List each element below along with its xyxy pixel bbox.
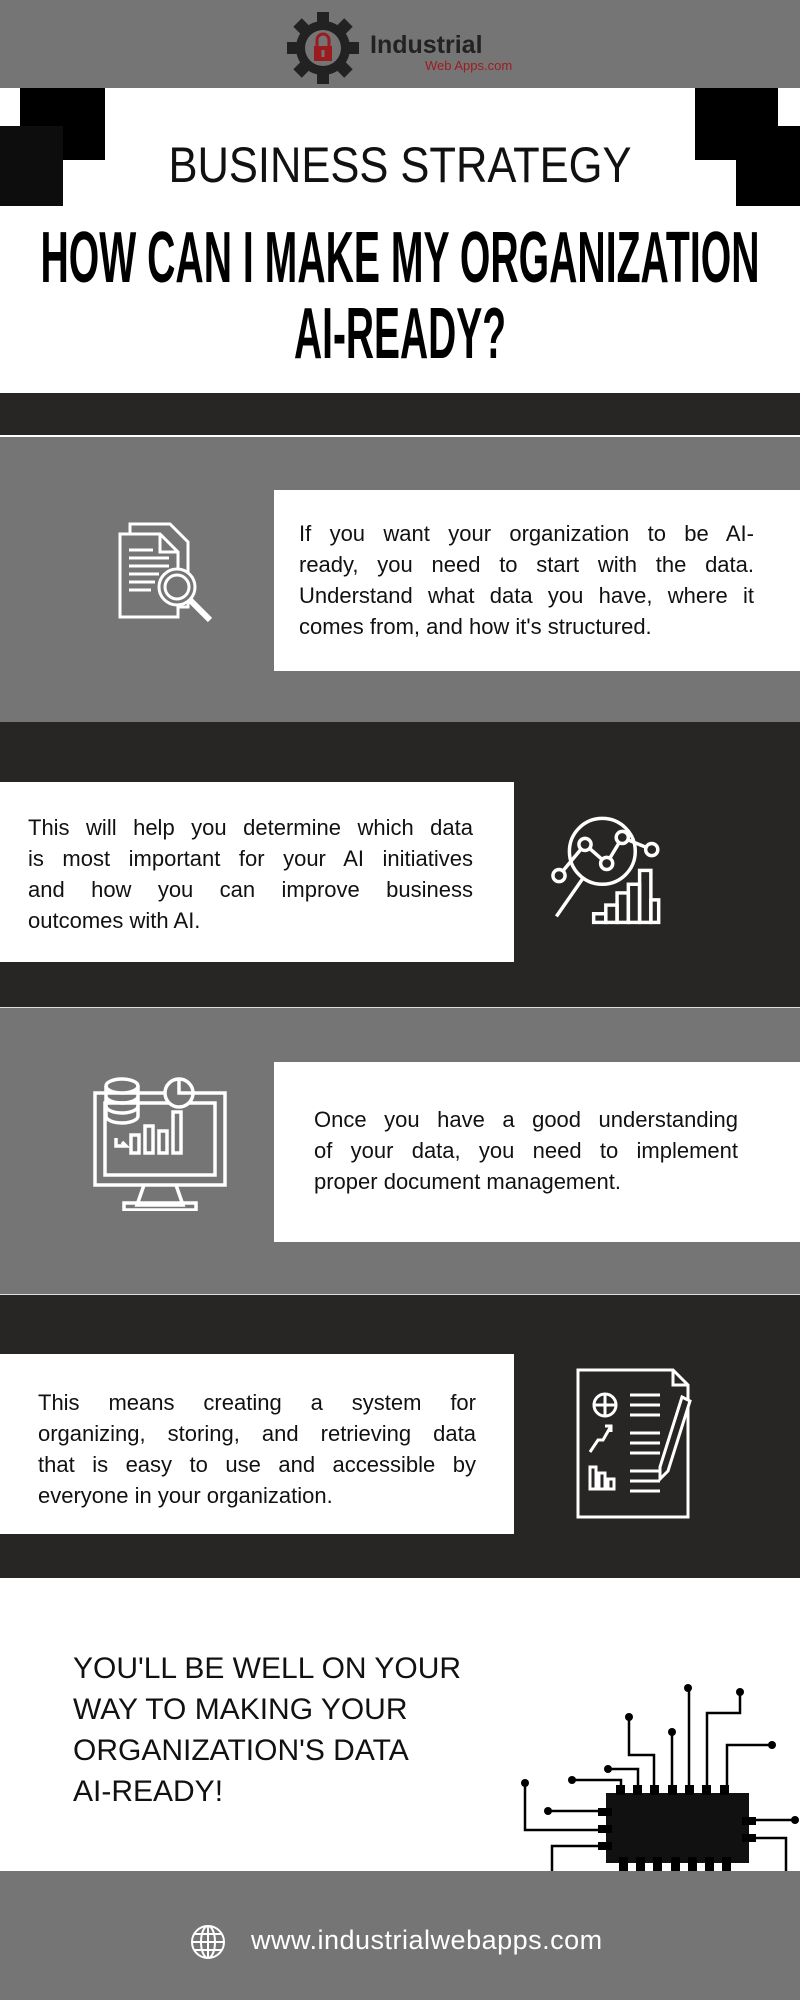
text box 4 (0, 1354, 514, 1534)
section 4 (0, 1295, 800, 1578)
text box 1 (274, 490, 800, 671)
section 3 (0, 1008, 800, 1294)
text box 3 (274, 1062, 800, 1242)
dark band (0, 393, 800, 435)
header bar with logo (0, 0, 800, 88)
text box 1: ready, you need to start with the data. (299, 552, 754, 577)
conclusion text: WAY TO MAKING YOUR (73, 1693, 408, 1726)
icon: circuit chip (521, 1684, 799, 1871)
text box 4: organizing, storing, and retrieving data (38, 1421, 476, 1446)
section 2 (0, 722, 800, 1007)
text box 1: Understand what data you have, where it (299, 583, 754, 608)
conclusion text: ORGANIZATION'S DATA (73, 1734, 409, 1767)
text box 2: is most important for your AI initiatives (28, 846, 473, 871)
text box 3: of your data, you need to implement (314, 1138, 738, 1163)
decorative black squares left (20, 88, 105, 160)
decorative black squares right (695, 88, 778, 160)
section 1 (0, 437, 800, 722)
conclusion text: AI-READY! (73, 1775, 223, 1808)
text box 4: everyone in your organization. (38, 1483, 333, 1508)
text box 2: outcomes with AI. (28, 908, 200, 933)
icon: monitor with data (93, 1077, 227, 1211)
footer (0, 1871, 800, 2000)
logo: Web Apps.com (425, 58, 512, 73)
text box 2: and how you can improve business (28, 877, 473, 902)
icon: report with pencil (576, 1368, 692, 1518)
title (40, 220, 760, 370)
text box 2 (0, 782, 514, 962)
text box 3: proper document management. (314, 1169, 621, 1194)
icon: document with magnifier (118, 522, 212, 622)
text box 2: This will help you determine which data (28, 815, 473, 840)
icon: analytics magnifier chart (551, 816, 660, 924)
text box 4: This means creating a system for (38, 1390, 476, 1415)
conclusion text: YOU'LL BE WELL ON YOUR (73, 1652, 461, 1685)
text box 1: comes from, and how it's structured. (299, 614, 652, 639)
icon: globe (191, 1925, 225, 1959)
website url: www.industrialwebapps.com (251, 1925, 603, 1955)
logo (287, 12, 512, 84)
text box 3: Once you have a good understanding (314, 1107, 738, 1132)
logo: Industrial (370, 31, 483, 59)
text box 4: that is easy to use and accessible by (38, 1452, 476, 1477)
conclusion text (73, 1652, 461, 1808)
text box 1: If you want your organization to be AI- (299, 521, 754, 546)
